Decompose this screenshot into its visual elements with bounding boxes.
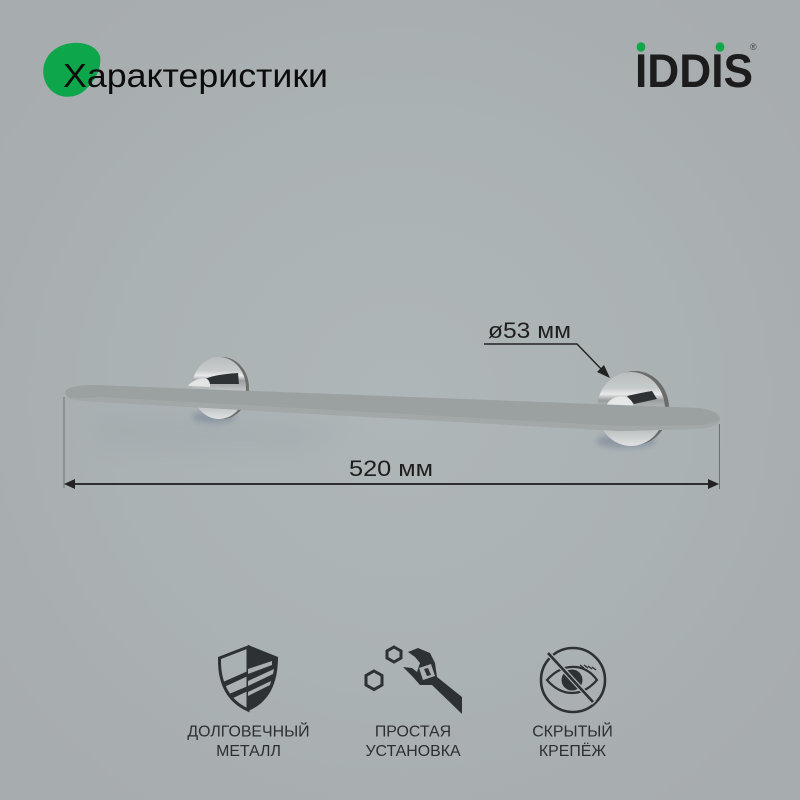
label: hidden fastening: КРЕПЁЖ — [539, 742, 606, 760]
right bracket — [596, 371, 669, 448]
label: durable metal: МЕТАЛЛ — [216, 743, 281, 760]
label: easy installation: ПРОСТАЯ — [375, 724, 451, 740]
left bracket — [188, 357, 249, 423]
heading: green blob and title: Характеристики — [63, 57, 328, 94]
heading: green blob and title — [43, 43, 328, 97]
label: easy installation: УСТАНОВКА — [365, 743, 461, 760]
shelf front edge — [66, 396, 720, 431]
icon: hidden mount crossed eye — [541, 648, 605, 712]
glass shelf — [65, 385, 720, 431]
shelf shadow on wall — [90, 410, 350, 450]
label: durable metal: ДОЛГОВЕЧНЫЙ — [187, 722, 310, 740]
logo: IDDIS: IDDIS — [635, 44, 753, 97]
dimension: diameter 53 mm — [484, 318, 610, 378]
dimension: diameter 53 mm: ø53 мм — [488, 318, 571, 343]
icon: wrench and nuts — [366, 647, 462, 714]
dimension: width 520 mm — [64, 397, 720, 489]
logo: IDDIS: ® — [750, 42, 757, 52]
dimension: width 520 mm: 520 мм — [349, 456, 433, 481]
icon: shield — [219, 645, 278, 711]
label: hidden fastening: СКРЫТЫЙ — [532, 722, 613, 740]
